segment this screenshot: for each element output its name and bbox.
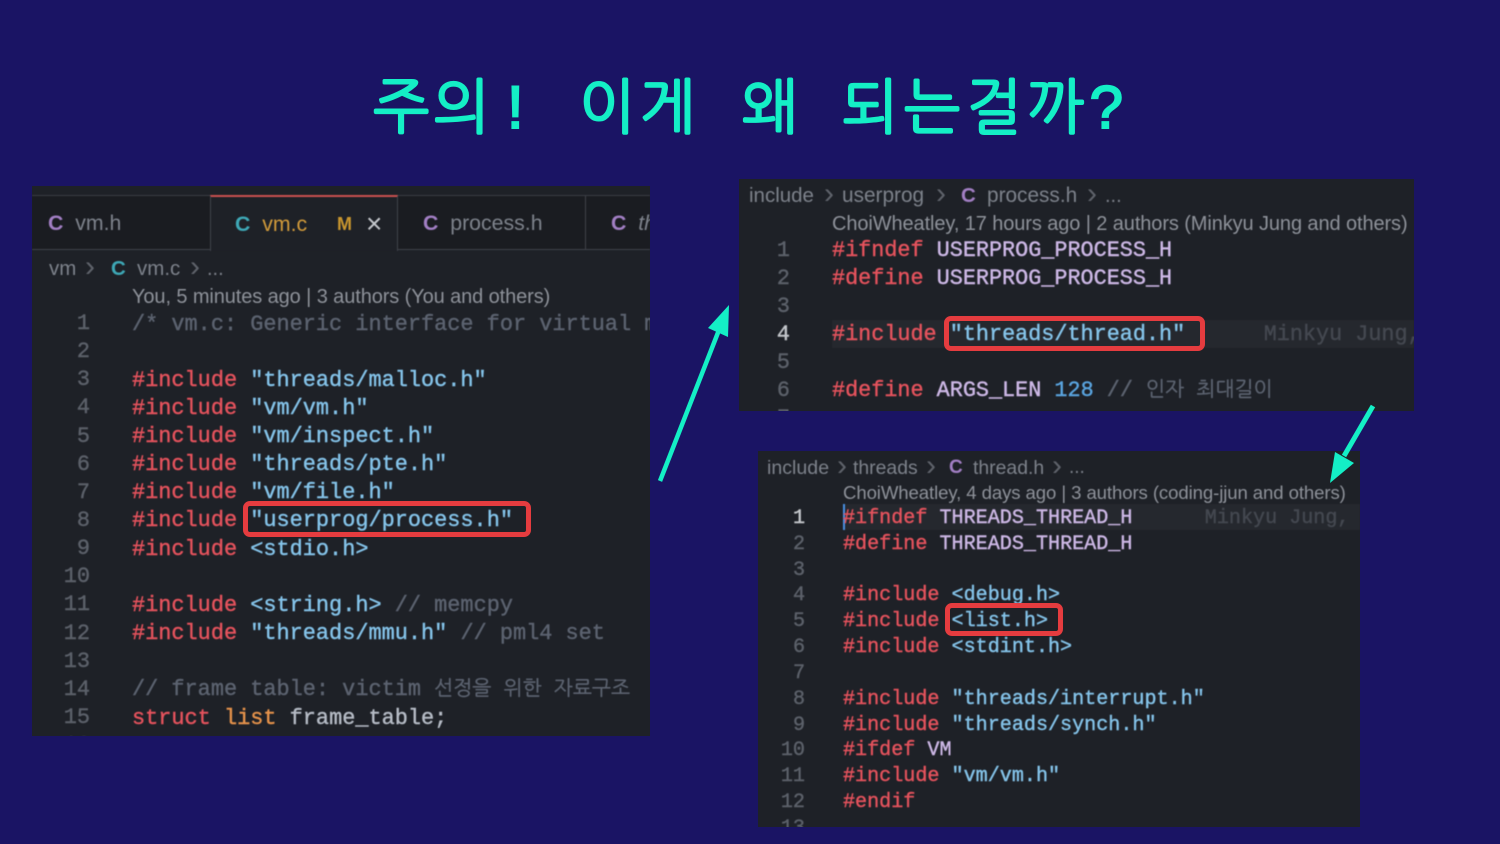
breadcrumb [48,250,224,283]
title: 주의 [373,74,494,141]
highlight box: userprog/process.h [243,501,531,537]
arrow: process.h to thread.h [1330,404,1376,483]
breadcrumb: threads [853,457,918,479]
tab: vm.c active: × [366,208,382,239]
panel: process.h editor [739,179,1414,411]
code: #ifndef THREADS_THREAD_H Minkyu Jung, #define THREADS_THREAD_H #include <debug.h> #include <list.h> #include <stdint.h> #include "threads/interrupt.h" #include "threads/synch.h" #ifdef VM #include "vm/vm.h" #endif [843,507,1349,814]
panel: vm.c editor [32,186,650,736]
code: #ifndef USERPROG_PROCESS_H #define USERPROG_PROCESS_H #include "threads/thread.h" Minkyu Jung, #define ARGS_LEN 128 // 인자 최대길이 [832,238,1414,403]
title: ! [507,74,524,141]
panel: thread.h editor [758,451,1360,827]
breadcrumb: process.h [987,184,1077,207]
tab: process.h: C process.h [423,211,543,235]
tab: vm.c active: C vm.c [235,212,307,236]
breadcrumb: ... [1069,457,1085,478]
blame annotation: You, 5 minutes ago | 3 authors (You and others) [132,286,550,308]
blame annotation: ChoiWheatley, 17 hours ago | 2 authors (Minkyu Jung and others) [832,213,1408,235]
title: 왜 [742,74,798,141]
breadcrumb: thread.h [973,457,1044,479]
current line highlight [843,504,1360,530]
breadcrumb: C [961,184,976,207]
breadcrumb: › [85,250,95,283]
breadcrumb: C [111,257,126,280]
highlight box: threads/thread.h [944,316,1205,351]
breadcrumb: › [190,250,200,283]
breadcrumb: userprog [842,184,924,207]
breadcrumb: ... [1105,185,1122,207]
highlight box: list.h [945,603,1063,636]
current line highlight [832,320,1414,348]
breadcrumb [767,451,1085,482]
breadcrumb: C [949,457,963,478]
title: 되는걸까? [842,74,1128,141]
breadcrumb: ... [207,258,224,280]
breadcrumb: include [749,184,814,207]
tab: vm.c active: M [337,214,352,234]
blame annotation: ChoiWheatley, 4 days ago | 3 authors (coding-jjun and others) [843,482,1346,503]
title: 이게 [579,74,700,141]
breadcrumb: vm [49,257,76,280]
tab separator and clipped tab [585,196,651,249]
tab: vm.h: C vm.h [48,211,121,235]
tab bar [32,195,650,250]
breadcrumb [749,179,1122,210]
breadcrumb: include [767,457,829,479]
tab: vm.c active [210,195,398,251]
cursor [843,504,845,530]
breadcrumb: vm.c [137,257,180,280]
title [373,74,1128,141]
arrow: vm.c to process.h [658,305,729,482]
